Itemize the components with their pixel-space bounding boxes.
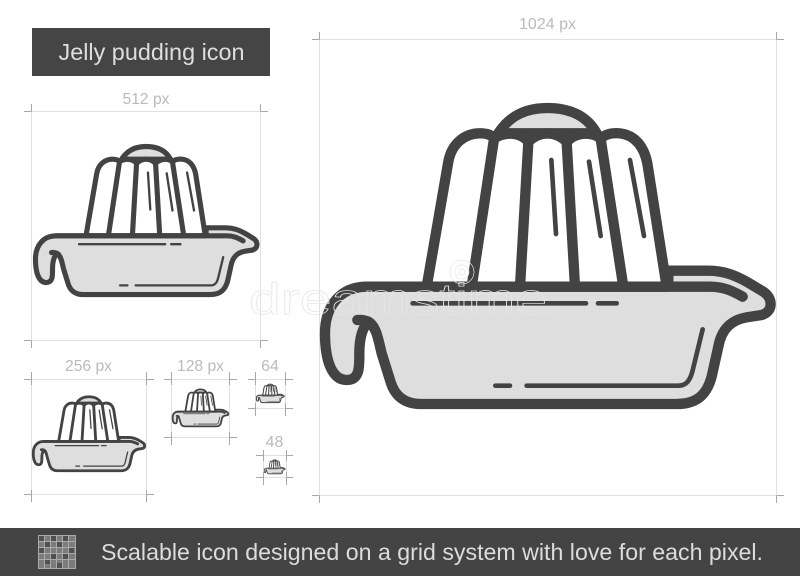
- icon: jelly pudding 256 px: [33, 397, 145, 471]
- size frame: 512 px: 512 px: [122, 91, 170, 108]
- icon: pixel grid: [38, 535, 76, 569]
- size frame: 64: 64: [261, 358, 279, 375]
- icon: jelly pudding 128 px: [173, 389, 228, 426]
- size frame: 256 px: [24, 358, 154, 502]
- size frame: 256 px: 256 px: [65, 358, 112, 375]
- size frame: 128 px: 128 px: [177, 358, 224, 375]
- size frame: 512 px: [24, 91, 268, 348]
- watermark: dreamstime: [249, 275, 547, 324]
- watermark: [249, 260, 550, 324]
- icon: jelly pudding 64 px: [256, 384, 284, 403]
- title banner: Jelly pudding icon: [58, 39, 244, 65]
- size frame: 64: [248, 358, 293, 416]
- icon: jelly pudding 48 px: [264, 460, 285, 474]
- footer bar: [0, 528, 800, 576]
- size frame: 128 px: [164, 358, 237, 445]
- size frame: 48: [256, 434, 293, 485]
- size frame: 48: 48: [266, 434, 284, 451]
- title banner: [32, 28, 270, 76]
- icon: jelly pudding 1024 px: [325, 108, 771, 404]
- icon: jelly pudding 512 px: [35, 147, 257, 295]
- size frame: 1024 px: 1024 px: [519, 16, 576, 33]
- footer tagline: Scalable icon designed on a grid system with love for each pixel.: [101, 539, 763, 565]
